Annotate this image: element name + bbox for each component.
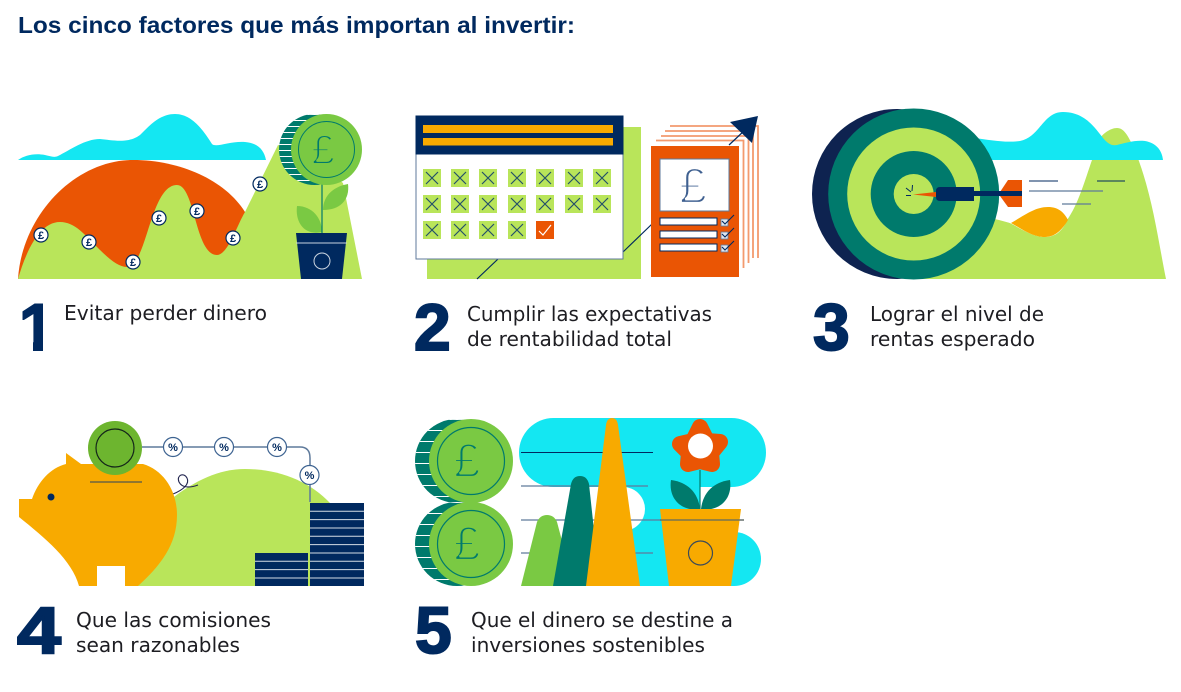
label 4: Que las comisiones bbox=[76, 608, 271, 632]
number 4: 4 bbox=[17, 593, 61, 667]
coin bottom: £ bbox=[454, 518, 480, 571]
green hill bbox=[138, 469, 330, 586]
panel: factor 3 bbox=[812, 108, 1166, 280]
label 2 bbox=[467, 302, 712, 351]
tokens: £ bbox=[130, 257, 136, 269]
label 4: sean razonables bbox=[76, 633, 240, 657]
label 3: rentas esperado bbox=[870, 327, 1035, 351]
orange document: £ bbox=[679, 158, 707, 214]
pot bbox=[296, 233, 347, 279]
coin: £ bbox=[311, 126, 335, 173]
number 1: 1 bbox=[19, 290, 56, 364]
cloud bbox=[18, 114, 266, 160]
panel: factor 4 bbox=[19, 421, 364, 586]
orange hill bbox=[18, 160, 245, 279]
connector lines bbox=[477, 224, 652, 279]
plant bbox=[297, 183, 348, 234]
label 2: de rentabilidad total bbox=[467, 327, 672, 351]
pot bbox=[660, 509, 744, 586]
tokens: £ bbox=[38, 230, 44, 242]
label 3: Lograr el nivel de bbox=[870, 302, 1044, 326]
panel: factor 1 bbox=[18, 114, 362, 279]
trees bbox=[521, 418, 640, 586]
horizontal lines bbox=[521, 486, 744, 553]
calendar bbox=[416, 116, 624, 259]
flower bbox=[671, 427, 730, 510]
green landscape bbox=[18, 145, 362, 279]
number 3: 3 bbox=[813, 290, 850, 364]
cyan background shapes bbox=[500, 418, 766, 586]
tokens: £ bbox=[86, 237, 92, 249]
percent badges: % bbox=[272, 442, 282, 454]
stacked pages bbox=[656, 126, 758, 268]
number 5: 5 bbox=[415, 593, 452, 667]
label 4 bbox=[76, 608, 271, 657]
number 2: 2 bbox=[414, 290, 451, 364]
lake bbox=[975, 160, 1092, 237]
coin bbox=[88, 421, 142, 475]
cloud bbox=[975, 112, 1163, 160]
speed lines bbox=[1029, 180, 1125, 182]
checked day bbox=[536, 221, 554, 239]
label 1: Evitar perder dinero bbox=[64, 301, 267, 325]
orange document bbox=[651, 146, 739, 277]
stacks of bars bbox=[255, 503, 364, 586]
percent line bbox=[142, 447, 310, 502]
dart bbox=[906, 180, 1022, 207]
tokens: £ bbox=[230, 233, 236, 245]
label 3 bbox=[870, 302, 1044, 351]
label 5 bbox=[471, 608, 733, 657]
coin bbox=[279, 114, 362, 185]
label 5: Que el dinero se destine a bbox=[471, 608, 733, 632]
mountain peak bbox=[915, 128, 1166, 279]
coin bottom bbox=[415, 502, 513, 586]
green backdrop bbox=[427, 127, 641, 279]
percent badges: % bbox=[305, 470, 315, 482]
piggy bank bbox=[19, 453, 177, 586]
tokens: £ bbox=[194, 206, 200, 218]
tail bbox=[173, 475, 198, 494]
label 2: Cumplir las expectativas bbox=[467, 302, 712, 326]
tokens: £ bbox=[257, 179, 263, 191]
target bbox=[812, 108, 999, 280]
title: Los cinco factores que más importan al invertir: bbox=[18, 12, 575, 38]
tokens: £ bbox=[156, 213, 162, 225]
tokens bbox=[34, 177, 267, 269]
percent badges: % bbox=[168, 442, 178, 454]
percent badges: % bbox=[219, 442, 229, 454]
panel: factor 2 bbox=[416, 116, 758, 279]
crossed days bbox=[423, 169, 611, 239]
panel: factor 5 bbox=[415, 418, 766, 586]
coin top: £ bbox=[454, 435, 480, 488]
yellow hill bbox=[1011, 207, 1068, 237]
label 5: inversiones sostenibles bbox=[471, 633, 705, 657]
coin top bbox=[415, 419, 513, 503]
percent badges bbox=[164, 438, 319, 484]
arrow bbox=[729, 116, 758, 145]
